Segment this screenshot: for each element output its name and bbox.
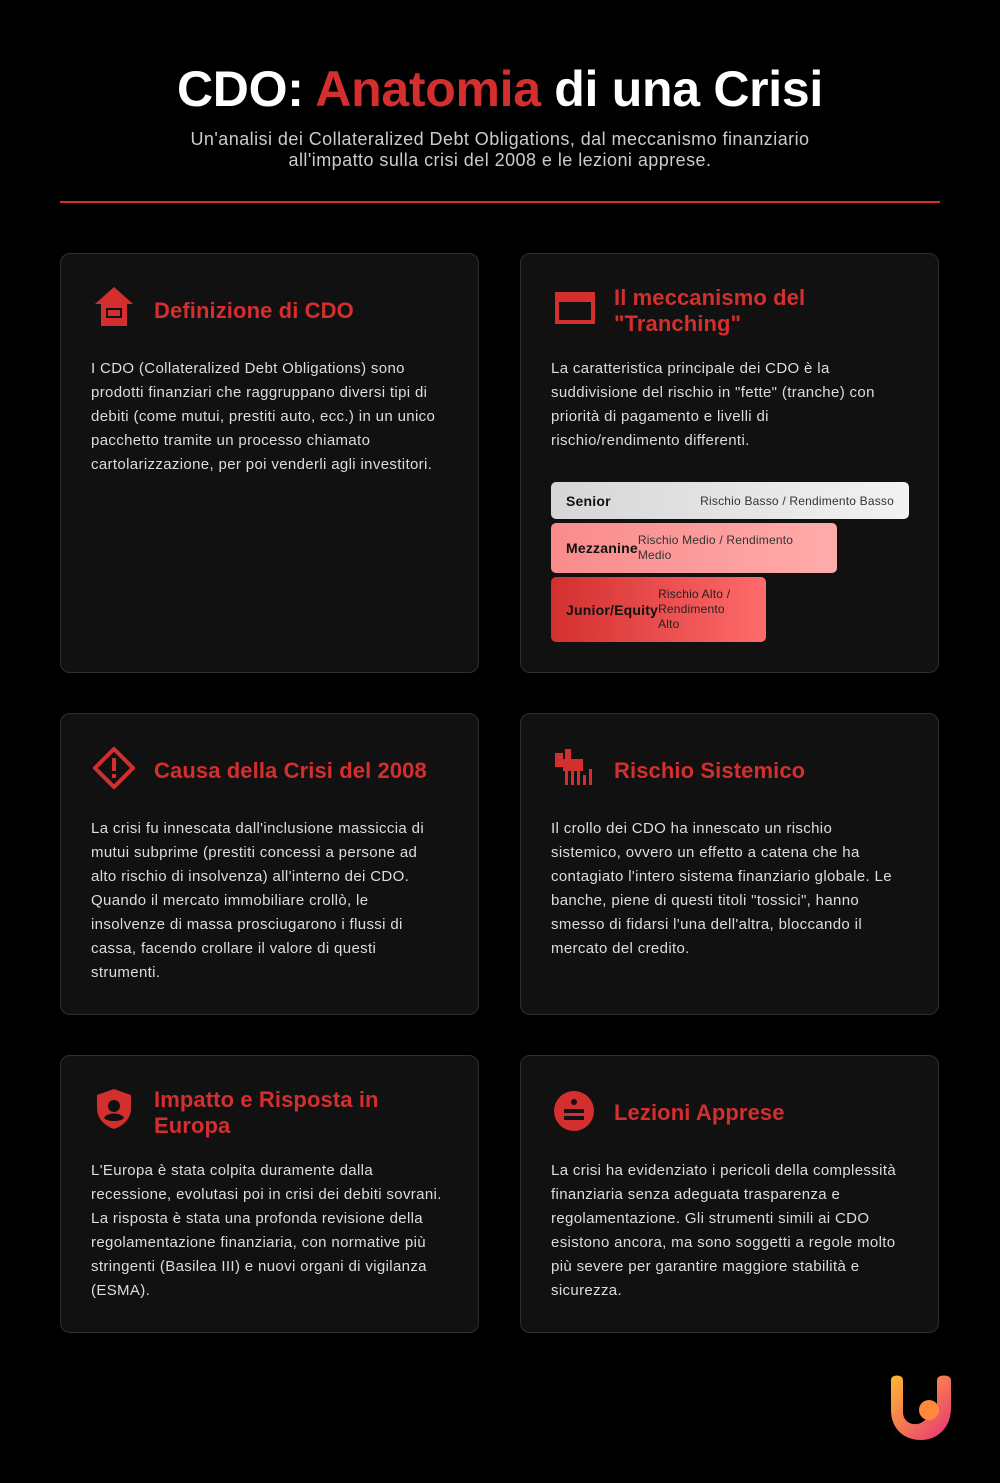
chart: tranches — [551, 482, 909, 642]
text: Il crollo dei CDO ha innescato un rischio sistemico, ovvero un effetto a catena che ha contagiato l'intero sistema finanziario globale. Le banche, piene di questi titoli "tossici", hanno smesso di fidarsi l'una dell'altra, bloccando il mercato del credito. — [551, 820, 892, 957]
tranche junior — [551, 577, 766, 642]
icon: chart bars — [555, 749, 592, 785]
tranche senior: Senior — [566, 492, 611, 508]
text: I CDO (Collateralized Debt Obligations) sono prodotti finanziari che raggruppano diversi tipi di debiti (come mutui, prestiti auto, ecc.) in un unico pacchetto tramite un processo chiamato cartolarizzazione, per poi venderli agli investitori. — [91, 360, 435, 473]
heading: Rischio Sistemico — [614, 758, 805, 783]
title: CDO: Anatomia di una Crisi — [177, 61, 823, 117]
tranche senior: Rischio Basso / Rendimento Basso — [700, 494, 894, 508]
panel: causa — [60, 713, 479, 1015]
heading: Impatto e Risposta in Europa — [154, 1087, 379, 1138]
icon: layers — [555, 292, 595, 324]
panel: europa — [60, 1055, 479, 1333]
text: La crisi fu innescata dall'inclusione massiccia di mutui subprime (prestiti concessi a persone ad alto rischio di insolvenza) all'interno dei CDO. Quando il mercato immobiliare crollò, le insolvenze di massa prosciugarono i flussi di cassa, facendo crollare il valore di questi strumenti. — [91, 820, 424, 981]
panel: rischio sistemico — [520, 713, 939, 1015]
tranche mezzanine — [551, 523, 837, 573]
heading: Causa della Crisi del 2008 — [154, 758, 427, 783]
text: L'Europa è stata colpita duramente dalla recessione, evolutasi poi in crisi dei debiti sovrani. La risposta è stata una profonda revisione della regolamentazione finanziaria, con normative più stringenti (Basilea III) e nuovi organi di vigilanza (ESMA). — [91, 1162, 442, 1299]
tranche mezzanine: Rischio Medio / Rendimento — [638, 533, 793, 547]
logo — [891, 1376, 951, 1440]
subtitle: Un'analisi dei Collateralized Debt Obligations, dal meccanismo finanziario — [190, 129, 810, 149]
panel: tranching — [520, 253, 939, 673]
tranche junior: Alto — [658, 617, 680, 631]
heading: Lezioni Apprese — [614, 1100, 785, 1125]
icon: shield — [97, 1089, 131, 1129]
subtitle: all'impatto sulla crisi del 2008 e le lezioni apprese. — [289, 150, 711, 170]
subtitle — [190, 129, 810, 170]
tranche mezzanine: Mezzanine — [566, 540, 638, 556]
tranche junior: Junior/Equity — [566, 602, 658, 618]
tranche senior — [551, 482, 909, 519]
text: La caratteristica principale dei CDO è la suddivisione del rischio in "fette" (tranche) con priorità di pagamento e livelli di rischio/rendimento differenti. — [551, 360, 875, 449]
icon: house — [95, 287, 133, 326]
panel: lezioni — [520, 1055, 939, 1333]
icon: warning diamond — [93, 747, 135, 789]
tranche junior: Rendimento — [658, 602, 725, 616]
tranche mezzanine: Medio — [638, 548, 672, 562]
heading: Definizione di CDO — [154, 298, 354, 323]
heading: Il meccanismo del "Tranching" — [614, 285, 805, 336]
panel: definizione — [60, 253, 479, 673]
text: La crisi ha evidenziato i pericoli della complessità finanziaria senza adeguata trasparenza e regolamentazione. Gli strumenti simili ai CDO esistono ancora, ma sono soggetti a regole molto più severe per garantire maggiore stabilità e sicurezza. — [551, 1162, 896, 1299]
icon: circle equals — [554, 1091, 594, 1131]
tranche junior: Rischio Alto / — [658, 587, 730, 601]
